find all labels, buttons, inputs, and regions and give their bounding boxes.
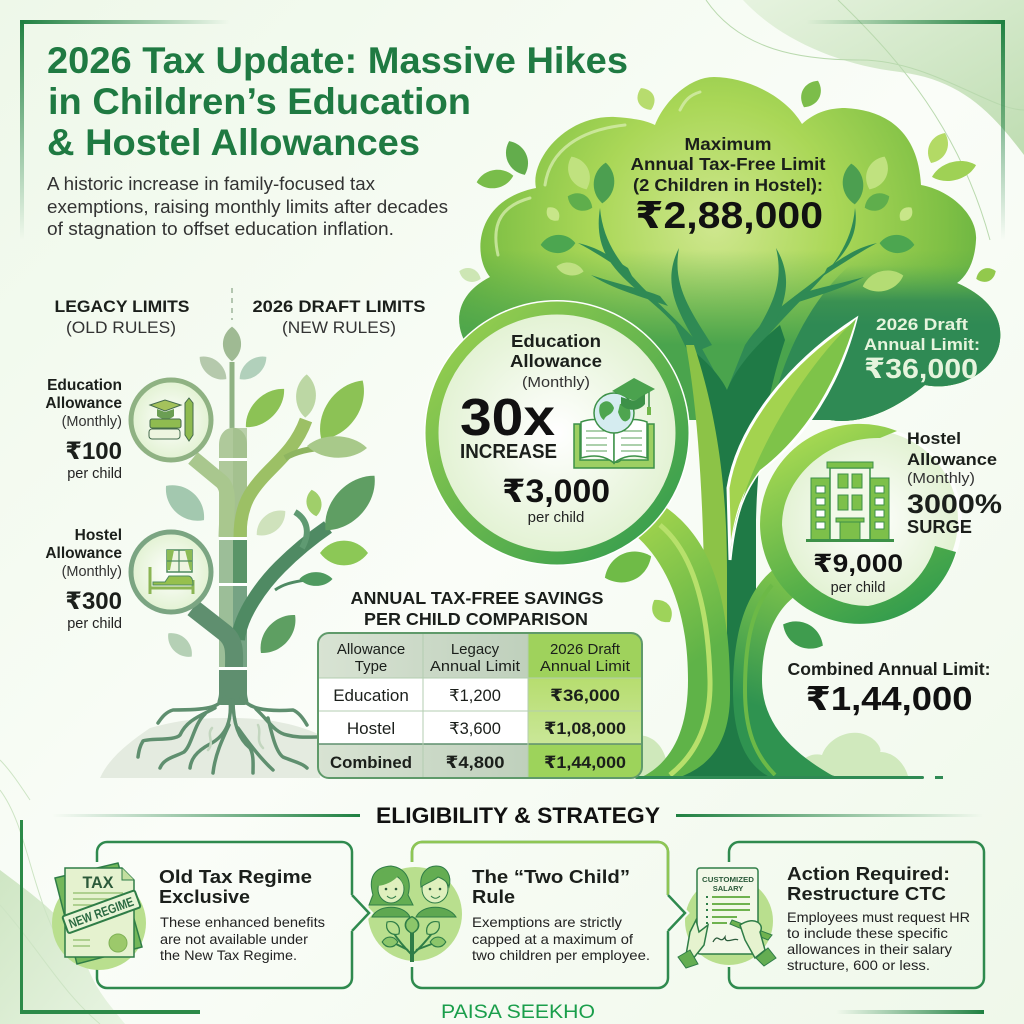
comparison table: ₹1,44,000	[544, 753, 626, 772]
dark canopy label: 2026 draft annual limit: ₹36,000	[864, 353, 978, 384]
panel: action required: Employees must request HR	[787, 909, 970, 925]
branch hook	[295, 512, 307, 548]
small tree	[100, 327, 386, 778]
icon: education badge	[131, 380, 211, 460]
panel: action required: to include these specific	[787, 925, 948, 941]
background bushes	[610, 733, 908, 776]
left labels: hostel legacy: Hostel	[75, 527, 122, 544]
panel: hostel allowance circle: 3000%	[907, 489, 1002, 519]
left labels: hostel legacy: Allowance	[45, 545, 122, 562]
comparison column headings: (NEW RULES)	[282, 319, 396, 337]
comparison column headings: LEGACY LIMITS	[54, 298, 190, 316]
icon: two children and sapling	[368, 866, 462, 962]
comparison table: Annual Limit	[540, 658, 631, 675]
panel: hostel allowance circle: ₹9,000	[813, 550, 903, 578]
panel: two child rule: The “Two Child”	[472, 866, 630, 887]
comparison table	[318, 633, 642, 778]
comparison table: Type	[355, 658, 387, 675]
comparison table: Hostel	[347, 719, 395, 738]
left labels: hostel legacy	[45, 527, 122, 632]
comparison table: ₹1,08,000	[544, 719, 626, 738]
left labels: hostel legacy: per child	[67, 616, 122, 632]
icon: hostel bed badge	[131, 532, 211, 612]
panel: hostel allowance circle	[760, 424, 1002, 624]
panel: hostel allowance circle: SURGE	[907, 516, 972, 537]
icon: tax document with stamp: NEW REGIME	[67, 894, 136, 931]
canopy	[440, 77, 1010, 430]
ground mound	[100, 718, 320, 778]
panel: old tax regime exclusive: are not available under	[160, 931, 308, 947]
panel: education allowance circle: per child	[528, 509, 584, 526]
section heading: eligibility and strategy: ELIGIBILITY & STRATEGY	[376, 803, 660, 828]
panel: old tax regime exclusive	[52, 842, 352, 988]
comparison table: ₹3,600	[449, 720, 501, 738]
dark canopy label: 2026 draft annual limit	[864, 316, 980, 384]
left labels: hostel legacy: ₹300	[65, 588, 122, 615]
panel: education allowance circle: Education	[511, 331, 601, 351]
panel: action required: structure, 600 or less.	[787, 957, 930, 973]
branch: hostel legacy	[193, 608, 234, 667]
table title	[350, 588, 604, 629]
comparison table: ₹36,000	[550, 686, 620, 705]
section heading: eligibility and strategy	[52, 803, 983, 828]
big tree	[440, 76, 1010, 779]
comparison table: Allowance	[337, 641, 405, 658]
panel: education allowance circle: Allowance	[510, 351, 602, 371]
arrow: first card chevron line	[352, 895, 369, 931]
leaves	[157, 327, 386, 663]
panel: action required: allowances in their salary	[787, 941, 952, 957]
comparison table: Legacy	[451, 641, 500, 658]
arrow: first card chevron	[352, 895, 369, 931]
canopy label: maximum limit: Maximum	[684, 134, 772, 154]
panel: action required: Action Required:	[787, 863, 950, 884]
panel: hostel allowance circle: Hostel	[907, 429, 961, 448]
title: & Hostel Allowances	[47, 122, 420, 163]
dark canopy label: 2026 draft annual limit: 2026 Draft	[876, 316, 969, 334]
twig: leaf branch	[285, 448, 325, 458]
subtitle: of stagnation to offset education inflation.	[47, 219, 394, 239]
footer brand: PAISA SEEKHO	[441, 1001, 595, 1023]
comparison table: ₹1,200	[449, 687, 501, 705]
ground line	[635, 776, 943, 779]
branch: education new	[240, 420, 306, 537]
panel: hostel allowance circle: Allowance	[907, 450, 997, 469]
panel: education allowance circle: ₹3,000	[502, 473, 610, 509]
title	[47, 40, 628, 163]
panel: old tax regime exclusive: the New Tax Regime.	[160, 947, 297, 963]
panel: two child rule	[352, 842, 668, 988]
panel: hostel allowance circle: per child	[831, 580, 885, 596]
subtitle: A historic increase in family-focused tax	[47, 174, 375, 194]
table title: ANNUAL TAX-FREE SAVINGS	[350, 588, 604, 608]
icon: tax document with stamp: TAX	[82, 873, 114, 892]
canopy label: maximum limit	[630, 134, 826, 236]
canopy label: maximum limit: Annual Tax-Free Limit	[630, 154, 826, 174]
panel: education allowance circle: INCREASE	[460, 441, 557, 463]
left labels: education legacy: Allowance	[45, 395, 122, 412]
icon: hostel building	[806, 462, 894, 542]
icon: customized salary document and hands: CUSTOMIZED	[702, 875, 755, 884]
branch: hostel new	[238, 527, 328, 640]
panel: action required: Restructure CTC	[787, 883, 946, 904]
left labels: education legacy	[45, 377, 122, 482]
panel: old tax regime exclusive: Exclusive	[159, 886, 250, 907]
comparison column headings: 2026 DRAFT LIMITS	[252, 298, 426, 316]
comparison table: Education	[333, 686, 409, 705]
comparison table: Combined	[330, 753, 412, 772]
table title: PER CHILD COMPARISON	[364, 609, 588, 629]
panel: two child rule: Exemptions are strictly	[472, 914, 622, 930]
arrow: second card chevron line	[668, 895, 685, 931]
panel: action required	[668, 842, 984, 988]
combined annual limit	[788, 659, 990, 717]
title: 2026 Tax Update: Massive Hikes	[47, 40, 628, 81]
panel: two child rule: capped at a maximum of	[472, 931, 633, 947]
icon: book, globe and cap	[574, 378, 655, 468]
canopy label: maximum limit: (2 Children in Hostel):	[633, 175, 823, 195]
subtitle	[47, 174, 448, 239]
panel: education allowance circle: (Monthly)	[522, 375, 590, 391]
comparison column headings	[54, 288, 426, 337]
branch: education legacy	[193, 458, 227, 537]
dark canopy label: 2026 draft annual limit: Annual Limit:	[864, 336, 980, 354]
arrow: second card chevron	[668, 895, 685, 931]
tall leaf	[728, 319, 856, 560]
combined annual limit: ₹1,44,000	[806, 680, 972, 717]
comparison table: 2026 Draft	[550, 641, 621, 658]
panel: two child rule: two children per employee.	[472, 947, 650, 963]
canopy leaves	[457, 76, 998, 296]
stem	[193, 362, 328, 670]
twig: lower leaf	[275, 580, 305, 590]
left labels: education legacy: (Monthly)	[62, 414, 122, 430]
left labels: education legacy: ₹100	[65, 438, 122, 465]
panel: education allowance circle: 30x	[460, 389, 555, 447]
comparison column headings: (OLD RULES)	[66, 319, 176, 337]
subtitle: exemptions, raising monthly limits after decades	[47, 197, 448, 217]
left labels: hostel legacy: (Monthly)	[62, 564, 122, 580]
icon: customized salary document and hands: SALARY	[713, 884, 743, 893]
canopy label: maximum limit: ₹2,88,000	[635, 195, 823, 236]
comparison table: ₹4,800	[446, 753, 504, 772]
icon: tax document with stamp	[52, 863, 146, 970]
left labels: education legacy: per child	[67, 466, 122, 482]
combined annual limit: Combined Annual Limit:	[788, 659, 990, 679]
panel: old tax regime exclusive: Old Tax Regime	[159, 866, 312, 887]
canopy branches	[578, 208, 877, 395]
panel: education allowance circle	[424, 300, 690, 566]
icon: customized salary document and hands	[678, 868, 776, 968]
title: in Children’s Education	[48, 81, 471, 122]
comparison table: Annual Limit	[430, 658, 521, 675]
trunk	[622, 325, 838, 777]
left labels: education legacy: Education	[47, 377, 122, 394]
panel: old tax regime exclusive: These enhanced benefits	[160, 914, 325, 930]
trunk leaves	[599, 544, 828, 656]
panel: hostel allowance circle: (Monthly)	[907, 471, 975, 487]
roots	[138, 668, 317, 773]
panel: two child rule: Rule	[472, 886, 515, 907]
